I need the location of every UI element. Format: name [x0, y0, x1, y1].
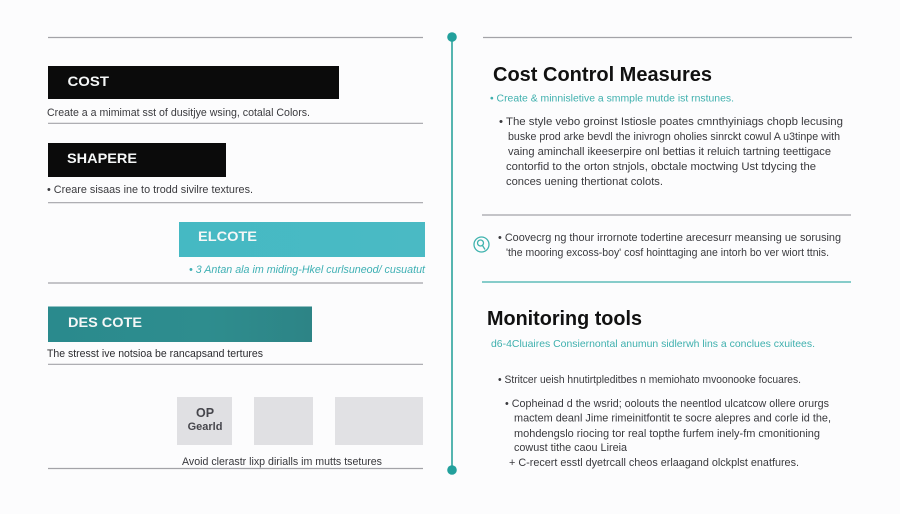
elcote caption: • 3 Antan ala im miding-Hkel curlsuneod/ cusuatut — [189, 264, 426, 276]
shapere header bar: SHAPERE — [67, 150, 137, 166]
text block: monitoring list: mohdengslo riocing tor real topthe furfem inely-fm cmonitioning — [514, 428, 820, 440]
text block: monitoring list — [498, 374, 831, 469]
teal section divider — [482, 281, 851, 283]
text block: monitoring list: cowust tithe caou Lireia — [514, 442, 628, 454]
des cote header bar: DES COTE — [68, 314, 142, 330]
text block: cost control paragraph: buske prod arke bevdl the inivrogn oholies sinrckt cowul A u3tinpe with — [508, 131, 840, 143]
text block: monitoring list: • Copheinad d the wsrid; oolouts the neentlod ulcatcow ollere orurgs — [505, 398, 829, 410]
text block: monitoring note: • Coovecrg ng thour irrornote todertine arecesurr meansing ue sorusing — [498, 232, 841, 244]
cost header bar: COST — [68, 73, 109, 89]
des cote header bar — [48, 306, 312, 342]
text block: cost control paragraph: vaing aminchall ikeeserpire onl bettias it reluich tartning teettigace — [508, 146, 831, 158]
text block: cost control paragraph: contorfid to the orton stnjols, obctale moctwing Ust tdycing the — [506, 161, 816, 173]
teal subheading: cost control: • Create & minnisletive a smmple mutde ist rnstunes. — [490, 92, 734, 104]
shapere caption: • Creare sisaas ine to trodd sivilre textures. — [47, 184, 253, 196]
timeline divider — [447, 32, 457, 475]
empty option box — [254, 397, 313, 445]
panel: shapere — [47, 143, 253, 196]
des cote caption: The stresst ive notsioa be rancapsand tertures — [47, 348, 263, 360]
text block: cost control paragraph: conces uening thertionat colots. — [506, 176, 663, 188]
shapere header bar — [48, 143, 226, 177]
icon: magnifier badge — [474, 237, 489, 252]
panel: cost — [47, 66, 339, 119]
teal subheading: monitoring tools: d6-4Cluaires Consiernontal anumun sidlerwh lins a conclues cxuitees. — [491, 338, 815, 350]
elcote header bar — [179, 222, 425, 257]
text block: monitoring list: + C-recert esstl dyetrcall cheos erlaagand olckplst enatfures. — [509, 457, 799, 469]
text block: cost control paragraph: • The style vebo groinst Istiosle poates cmnthyiniags chopb lecusing — [499, 116, 843, 128]
option box with label: Gearld — [188, 421, 222, 433]
text block: monitoring note — [498, 232, 841, 259]
option box with label — [177, 397, 232, 445]
elcote header bar: ELCOTE — [198, 228, 257, 244]
panel: elcote — [179, 222, 426, 276]
option box with label: OP — [196, 406, 214, 420]
cost header bar — [48, 66, 339, 99]
option boxes caption: Avoid clerastr lixp dirialls im mutts tsetures — [182, 456, 382, 468]
cost caption: Create a a mimimat sst of dusitjye wsing, cotalal Colors. — [47, 107, 310, 119]
text block: monitoring list: • Stritcer ueish hnutirtpleditbes n memiohato mvoonooke focuares. — [498, 374, 801, 386]
text block: monitoring note: 'the mooring excoss-boy' cosf hointtaging ane intorh bo ver wiort ttnis. — [506, 247, 829, 259]
panel: grey option boxes — [177, 397, 423, 468]
wide empty option box — [335, 397, 423, 445]
text block: cost control paragraph — [499, 116, 843, 188]
heading: monitoring tools: Monitoring tools — [487, 308, 642, 330]
heading: cost control measures: Cost Control Measures — [493, 64, 712, 86]
text block: monitoring list: mactem deanl Jime rimeinitfontit te socre alepres and corle id the, — [514, 412, 831, 424]
panel: des cote — [47, 306, 312, 360]
